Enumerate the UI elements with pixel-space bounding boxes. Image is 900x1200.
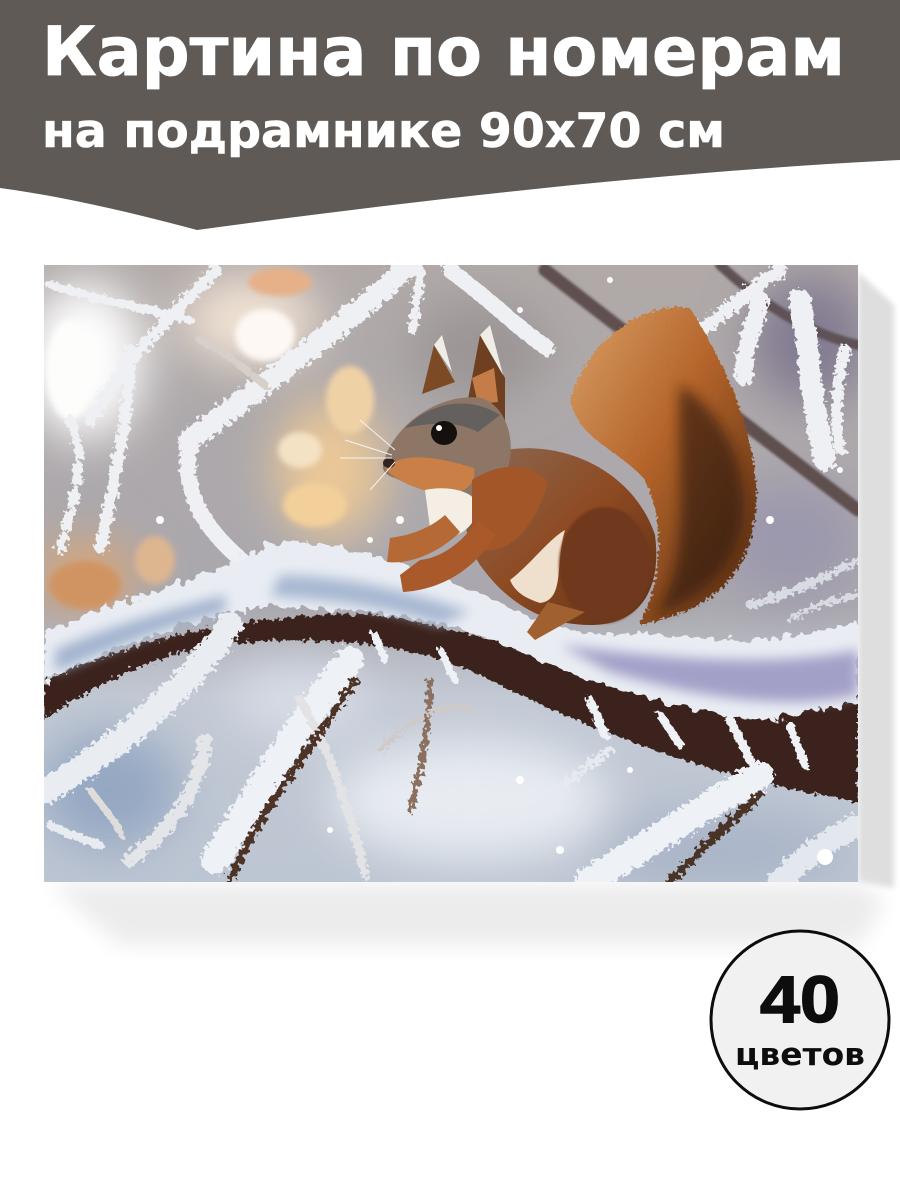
subtitle: на подрамнике 90х70 см: [42, 104, 725, 159]
warm bokeh highlights: [46, 268, 374, 609]
belly: [510, 530, 565, 603]
eye: [431, 421, 457, 445]
arms and paws: [400, 528, 484, 592]
snowflakes: [156, 277, 843, 865]
snow shading: [55, 575, 858, 702]
tail: [570, 307, 756, 625]
head: [383, 397, 511, 496]
main branch: bark: [44, 614, 858, 802]
whiskers: [340, 420, 395, 490]
nose: [383, 458, 395, 468]
title: Картина по номерам: [42, 13, 845, 92]
painting: squirrel on a snowy branch: [25, 265, 870, 890]
ears: [422, 325, 505, 430]
badge number: 40: [760, 962, 840, 1036]
badge label: цветов: [735, 1037, 865, 1073]
hanging frost under the branch: [375, 635, 805, 765]
frosted twigs: [50, 265, 858, 620]
lower snowy branches: [48, 625, 858, 882]
haunch: [559, 507, 651, 623]
background bokeh: [25, 275, 870, 890]
canvas shadow: [50, 272, 894, 945]
body: [465, 448, 656, 625]
squirrel: [340, 307, 756, 640]
header banner: [0, 0, 900, 230]
main branch: snow: [44, 543, 858, 722]
dark upper-right branches: [545, 265, 858, 510]
chest: [425, 488, 472, 534]
badge: 40 colours: [711, 931, 889, 1109]
